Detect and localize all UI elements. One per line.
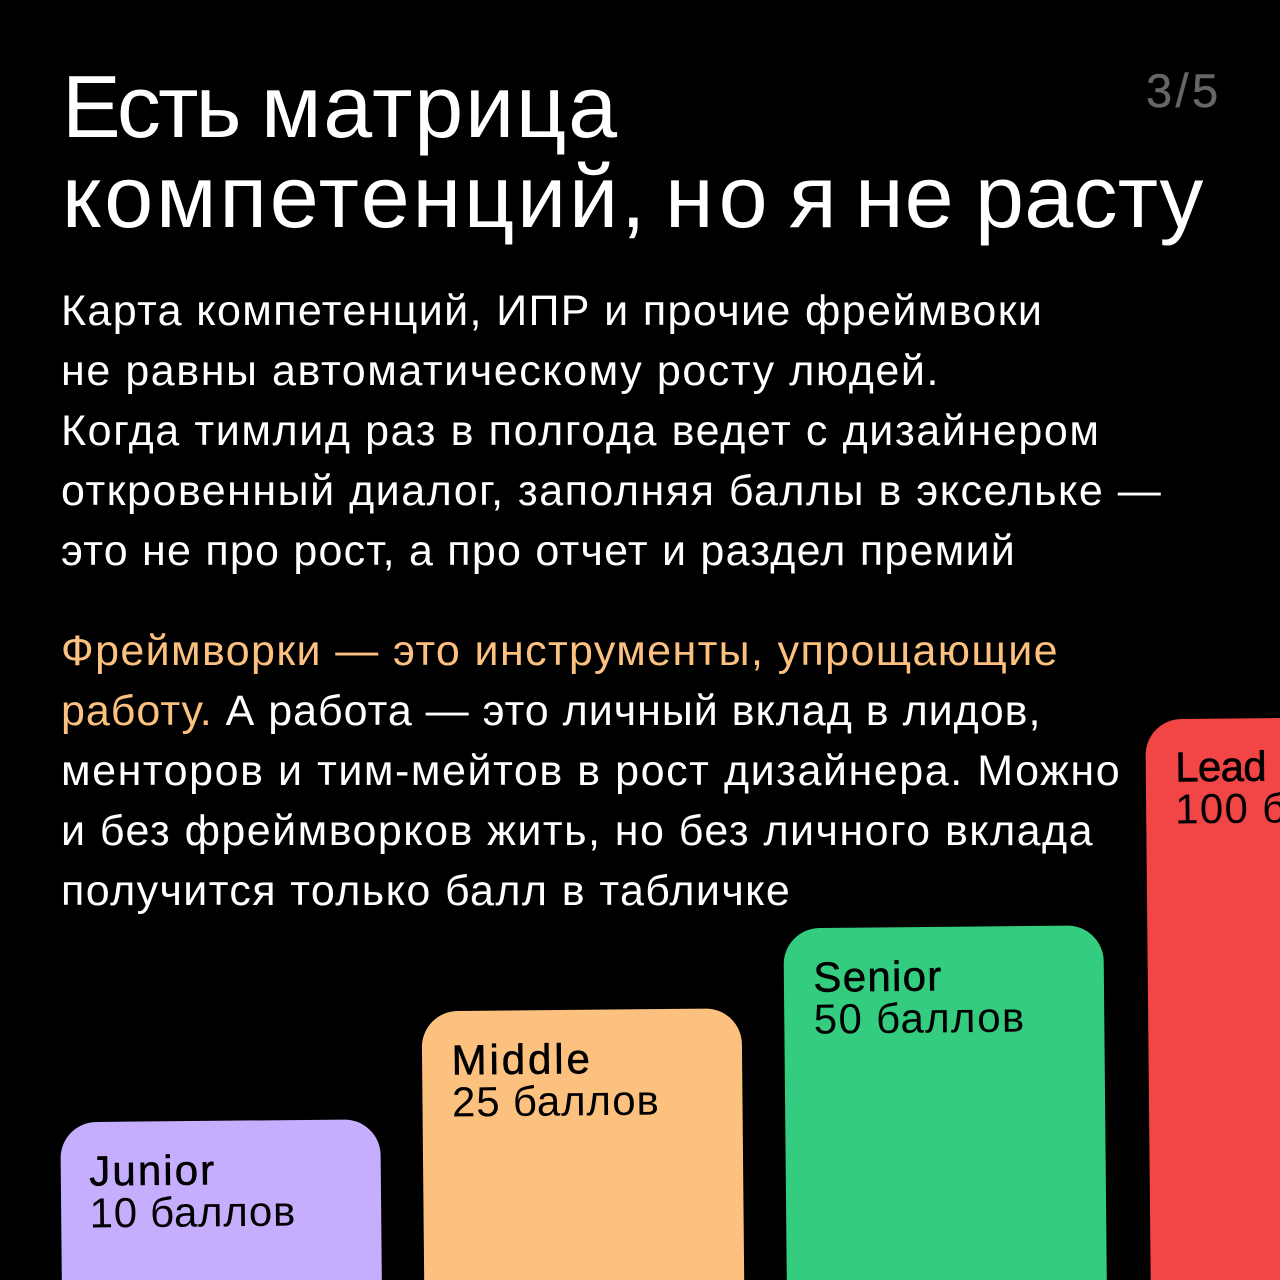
text block: frameworks paragraph: и без фреймворков жить, но без личного вклада (61, 807, 1094, 855)
bar: Junior (60, 1119, 382, 1280)
text block: intro paragraph (61, 287, 1162, 575)
bar: Junior: 10 баллов (89, 1188, 296, 1237)
text block: intro paragraph: не равны автоматическому росту людей. (61, 347, 940, 395)
bar: Middle (422, 1008, 744, 1280)
title: расту (975, 147, 1204, 246)
bar: Senior (783, 925, 1107, 1280)
title: я (789, 147, 837, 246)
text block: frameworks paragraph: Фреймворки — это инструменты, упрощающие (61, 627, 1059, 675)
bar: Lead (1145, 717, 1280, 1280)
title (62, 57, 1204, 246)
title: компетенций, (62, 147, 648, 246)
title: Есть (62, 57, 239, 156)
text block: intro paragraph: Когда тимлид раз в полгода ведет с дизайнером (61, 407, 1101, 455)
text block: intro paragraph: откровенный диалог, заполняя баллы в эксельке — (61, 467, 1162, 515)
page counter: 3/5 (1146, 64, 1222, 117)
text block: frameworks paragraph: менторов и тим-мейтов в рост дизайнера. Можно (61, 747, 1121, 795)
bar: Senior: Senior (813, 952, 943, 1001)
title: матрица (261, 57, 619, 156)
bar: Junior: Junior (89, 1146, 216, 1195)
bar: Lead: Lead (1175, 743, 1266, 791)
title: не (855, 147, 955, 246)
title: но (665, 147, 773, 246)
text block: intro paragraph: это не про рост, а про отчет и раздел премий (61, 527, 1016, 575)
text block: frameworks paragraph: получится только балл в табличке (61, 867, 791, 915)
bar: Middle: Middle (451, 1035, 593, 1084)
bar: Middle: 25 баллов (452, 1077, 660, 1126)
text block: frameworks paragraph: работу. А работа — это личный вклад в лидов, (61, 687, 1041, 735)
bar: Senior: 50 баллов (814, 994, 1026, 1043)
text block: intro paragraph: Карта компетенций, ИПР и прочие фреймвоки (61, 287, 1043, 335)
text block: frameworks paragraph (61, 627, 1121, 915)
